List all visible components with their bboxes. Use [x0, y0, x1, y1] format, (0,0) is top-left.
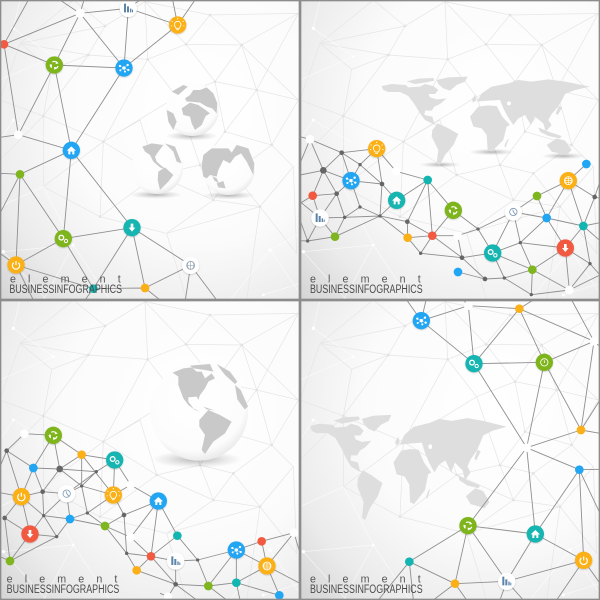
- caption: [7, 574, 119, 596]
- icon: home: [527, 525, 544, 543]
- icon: globe: [560, 172, 577, 189]
- network links: [378, 300, 600, 600]
- icon: download: [557, 239, 574, 257]
- icon: clock: [58, 485, 75, 502]
- icon: share: [342, 172, 360, 189]
- icon: recycle: [46, 56, 63, 74]
- icon: light bulb: [105, 486, 122, 504]
- icon: recycle: [45, 427, 62, 444]
- icon: home: [388, 192, 405, 209]
- globe: Americas: [130, 143, 183, 199]
- faint background mesh: [0, 0, 300, 300]
- panel background: [300, 300, 600, 600]
- icon: power: [13, 488, 30, 505]
- icon: globe: [182, 257, 199, 274]
- icon: globe: [258, 557, 276, 575]
- icon: power: [575, 552, 592, 569]
- large globe: [150, 363, 248, 468]
- panel: world map wave network: [300, 0, 600, 300]
- icon: power: [7, 256, 25, 274]
- faint background mesh: [0, 300, 300, 600]
- world map: [310, 415, 507, 520]
- icon: light bulb: [169, 16, 186, 34]
- globes group: [130, 83, 255, 199]
- caption: element: [310, 574, 421, 586]
- panel border: [1, 1, 299, 299]
- caption: element: [10, 274, 121, 286]
- small nodes: [0, 9, 149, 293]
- icon: chart: [498, 573, 515, 590]
- caption: BUSINESSINFOGRAPHICS: [7, 582, 119, 596]
- world map: [382, 77, 590, 165]
- caption: element: [310, 274, 421, 286]
- icon: recycle: [445, 202, 462, 219]
- icon: download: [123, 219, 141, 236]
- icon: chart: [167, 552, 184, 570]
- globe: Asia and Australia: [202, 142, 255, 199]
- caption: BUSINESSINFOGRAPHICS: [9, 282, 122, 296]
- panel border: [301, 301, 599, 599]
- map shadows: [419, 149, 585, 168]
- small nodes: [405, 301, 598, 588]
- caption: BUSINESSINFOGRAPHICS: [310, 282, 423, 296]
- faint background mesh: [300, 300, 600, 600]
- small nodes: [2, 429, 298, 600]
- panel: large globe network: [0, 300, 300, 600]
- icon: gears: [465, 355, 483, 372]
- icon: clock: [505, 203, 522, 221]
- icon: share: [413, 312, 430, 329]
- panel: world map right network: [300, 300, 600, 600]
- icon: gears: [106, 451, 123, 469]
- panel background: [0, 0, 300, 300]
- panel background: [0, 300, 300, 600]
- small nodes: [306, 135, 597, 296]
- icon: home: [150, 492, 167, 510]
- icon: recycle: [459, 517, 477, 534]
- icon: download: [21, 525, 39, 543]
- icon: chart: [311, 209, 329, 227]
- icon: share: [228, 541, 245, 559]
- icon: gears: [484, 244, 501, 262]
- panel background: [300, 0, 600, 300]
- icon: light bulb: [368, 140, 385, 157]
- panel border: [301, 1, 599, 299]
- caption: element: [7, 574, 117, 586]
- globe: Africa and Europe: [166, 83, 219, 141]
- caption: BUSINESSINFOGRAPHICS: [310, 582, 423, 596]
- caption: [310, 274, 423, 296]
- caption: [9, 274, 122, 296]
- network links: [0, 0, 217, 300]
- panel border: [1, 301, 299, 599]
- icon: chart: [120, 0, 137, 17]
- network links: [300, 137, 600, 295]
- faint background mesh: [300, 0, 600, 300]
- icon: home: [63, 142, 80, 159]
- icon: share: [115, 59, 133, 77]
- icon: clock: [536, 354, 553, 371]
- icon: gears: [55, 230, 72, 247]
- caption: [310, 574, 423, 596]
- panel: globes network: [0, 0, 300, 300]
- network links: [0, 434, 300, 600]
